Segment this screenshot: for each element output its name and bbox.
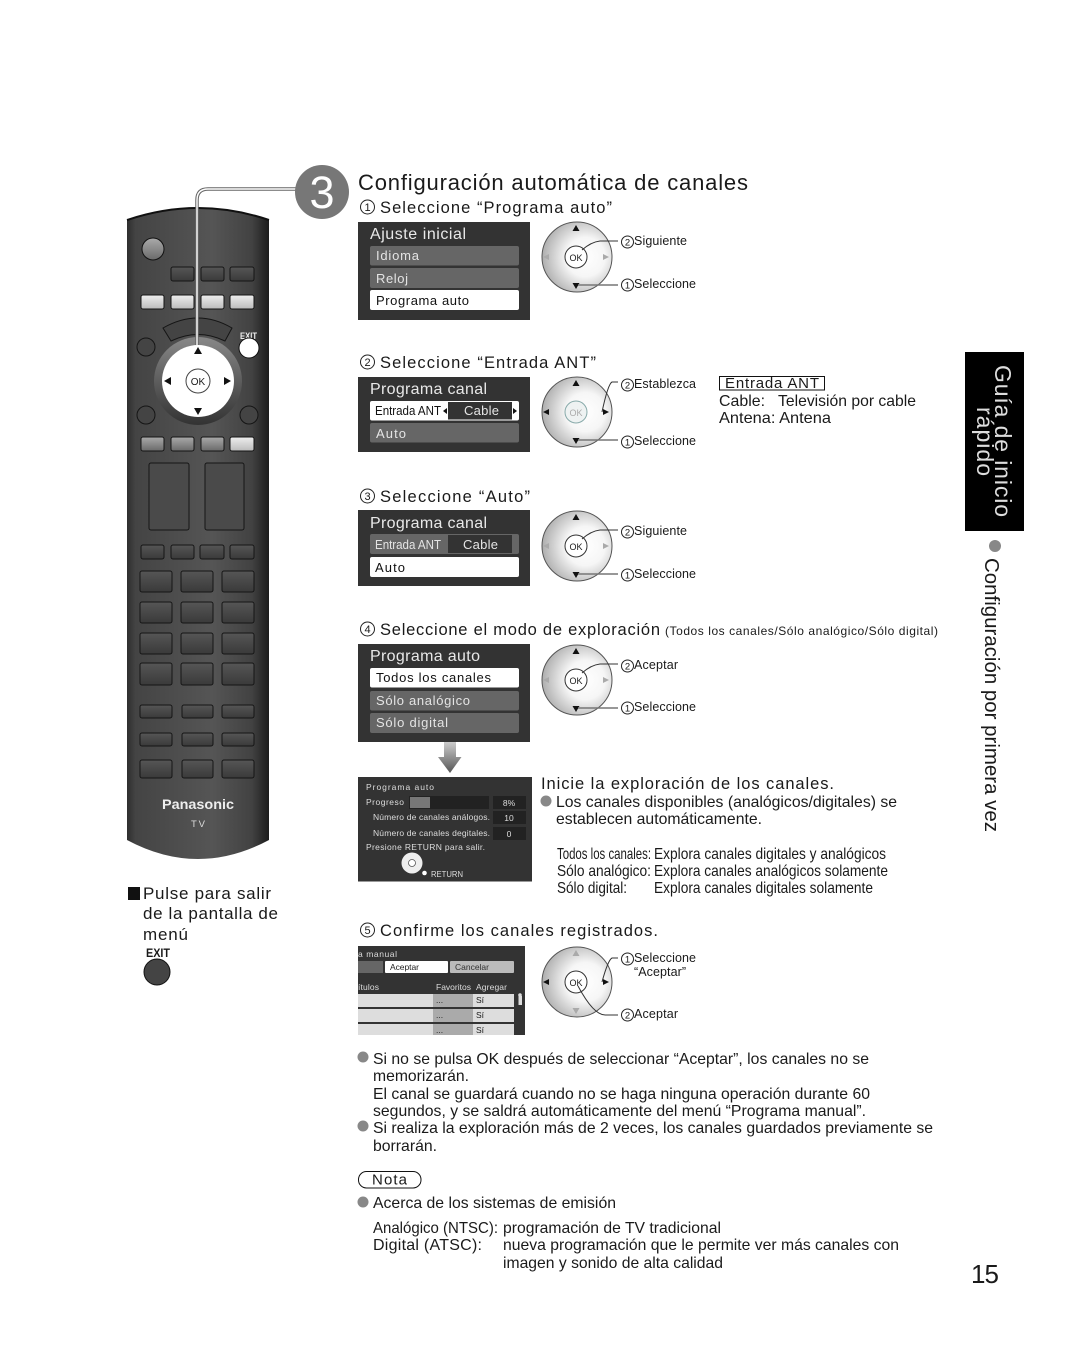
dial: step 5: “Aceptar” xyxy=(634,965,686,979)
step 4 heading: 4 xyxy=(364,624,371,636)
title: Configuración automática de canales xyxy=(358,170,748,195)
TV label: TV xyxy=(191,819,206,830)
step 4 heading xyxy=(360,621,938,639)
text block: notes: Si realiza la exploración más de 2 veces, los canales guardados previamente se xyxy=(373,1120,933,1137)
menu: Ajuste inicial: Programa auto xyxy=(376,293,469,308)
step 4 heading: Seleccione el modo de exploración xyxy=(380,621,660,639)
exit instruction xyxy=(128,884,278,985)
panel: manual program screen: ... xyxy=(436,995,443,1005)
side tab: quick start guide: Guía de inicio xyxy=(990,365,1016,517)
text block: scan modes: Explora canales digitales y analógicos xyxy=(654,846,886,863)
lower button rows xyxy=(140,437,254,778)
remote body xyxy=(127,208,269,859)
exit instruction: menú xyxy=(143,925,188,944)
dial: step 2: Seleccione xyxy=(634,434,696,448)
panel: manual program screen: Aceptar xyxy=(390,962,419,972)
panel: manual program screen: ... xyxy=(436,1010,443,1020)
exit instruction: Pulse para salir xyxy=(143,884,271,903)
text block: notes: borrarán. xyxy=(373,1138,437,1155)
dial: step 1: Seleccione xyxy=(634,277,696,291)
dial: step 5: Aceptar xyxy=(634,1007,678,1021)
panel: manual program screen: Sí xyxy=(476,1025,485,1035)
panel: scan progress screen: 0 xyxy=(507,829,512,839)
dial: step 3: Seleccione xyxy=(634,567,696,581)
text block: broadcast systems: nueva programación que le permite ver más canales con xyxy=(503,1237,899,1254)
step 3 heading: Seleccione “Auto” xyxy=(380,488,530,506)
text block: notes: El canal se guardará cuando no se haga ninguna operación durante 60 xyxy=(373,1086,870,1103)
menu: Ajuste inicial: Idioma xyxy=(376,248,420,263)
dial: step 1 xyxy=(542,222,696,292)
exit instruction: de la pantalla de xyxy=(143,904,278,923)
text block: scan modes: Sólo digital: xyxy=(557,880,627,897)
menu: Programa canal, Auto: Auto xyxy=(375,560,405,575)
menu: Programa auto: Sólo analógico xyxy=(376,693,470,708)
icon: exit button: EXIT xyxy=(146,946,171,960)
remote control xyxy=(127,208,269,859)
step 2 heading: 2 xyxy=(364,357,371,369)
page number: 15 xyxy=(971,1259,999,1289)
panel: scan progress screen: Programa auto xyxy=(366,782,434,792)
step 5 heading: Confirme los canales registrados. xyxy=(380,922,658,940)
dial: step 3: 2 xyxy=(625,528,630,538)
dial: step 1: OK xyxy=(569,253,583,263)
panel: manual program screen xyxy=(358,946,525,1035)
text block: broadcast systems: programación de TV tradicional xyxy=(503,1220,721,1237)
text block: broadcast systems: Acerca de los sistemas de emisión xyxy=(373,1195,616,1212)
exit button xyxy=(239,331,259,358)
panel: scan progress screen: 8% xyxy=(503,798,516,808)
menu: Programa canal, Auto: Programa canal xyxy=(370,515,487,532)
menu: Programa canal, Entrada ANT: Cable xyxy=(464,403,499,418)
dial: step 3: 1 xyxy=(625,570,630,582)
menu: Programa canal, Auto: Cable xyxy=(463,537,498,552)
dial: step 1: Siguiente xyxy=(634,234,687,248)
panel: scan progress screen: Presione RETURN para salir. xyxy=(366,842,485,852)
connector line from step 3 to directional pad xyxy=(197,189,298,345)
panel: manual program screen: a manual xyxy=(358,949,397,959)
menu: Programa canal, Auto xyxy=(358,510,530,586)
text block: notes: segundos, y se saldrá automáticamente del menú “Programa manual”. xyxy=(373,1103,866,1120)
dial: step 2 xyxy=(542,377,696,448)
side heading: first time setup: Configuración por primera vez xyxy=(980,558,1002,832)
dial: step 5: OK xyxy=(569,978,583,988)
dial: step 5 xyxy=(542,947,696,1022)
nota badge xyxy=(358,1172,421,1188)
step 1 heading: Seleccione “Programa auto” xyxy=(380,199,612,217)
step number 3 xyxy=(295,165,349,219)
step 2 heading: Seleccione “Entrada ANT” xyxy=(380,354,596,372)
text block: notes: memorizarán. xyxy=(373,1068,469,1085)
dial: step 4: 2 xyxy=(625,662,630,672)
top button rows xyxy=(137,267,258,424)
icon: exit button xyxy=(144,946,171,985)
dial: step 3: Siguiente xyxy=(634,524,687,538)
dial: step 1: 2 xyxy=(625,238,630,248)
panel: scan progress screen: Número de canales análogos. xyxy=(373,812,490,822)
dial: step 2: 2 xyxy=(625,380,630,392)
text block: broadcast systems: imagen y sonido de alta calidad xyxy=(503,1255,723,1272)
step number 3: 3 xyxy=(309,167,335,218)
directional pad: OK xyxy=(191,377,206,388)
step 1 heading: 1 xyxy=(364,202,371,214)
panel: manual program screen: ítulos xyxy=(358,982,379,992)
menu: Programa auto: Programa auto xyxy=(370,648,480,665)
dial: step 4: Seleccione xyxy=(634,700,696,714)
callout: Entrada ANT options: Cable: xyxy=(719,393,765,410)
text block: start scan xyxy=(540,775,897,828)
text block: scan modes: Explora canales analógicos solamente xyxy=(654,863,888,880)
dial: step 2: Establezca xyxy=(634,377,696,391)
nota badge: Nota xyxy=(372,1172,408,1188)
panel: manual program screen: ... xyxy=(436,1025,443,1035)
text block: start scan: Los canales disponibles (analógicos/digitales) se xyxy=(556,794,897,811)
dial: step 3: OK xyxy=(569,542,583,552)
dial: step 5: Seleccione xyxy=(634,951,696,965)
text block: notes: Si no se pulsa OK después de seleccionar “Aceptar”, los canales no se xyxy=(373,1051,869,1068)
text block: broadcast systems: Digital (ATSC): xyxy=(373,1237,482,1254)
dial: step 4 xyxy=(542,645,696,715)
dial: step 1: 1 xyxy=(625,280,630,292)
text block: notes xyxy=(358,1051,933,1155)
panel: scan progress screen: Número de canales degitales. xyxy=(373,828,490,838)
menu: Programa auto: Sólo digital xyxy=(376,715,448,730)
text block: scan modes: Todos los canales: xyxy=(557,846,651,863)
text block: start scan: establecen automáticamente. xyxy=(556,811,762,828)
panel: scan progress screen xyxy=(358,777,532,882)
power button xyxy=(142,238,164,260)
directional pad xyxy=(154,337,242,425)
dial: step 3 xyxy=(542,511,696,582)
callout: Entrada ANT options: Entrada ANT xyxy=(725,375,819,392)
callout: Entrada ANT options: Televisión por cable xyxy=(778,393,916,410)
menu: Programa auto xyxy=(358,644,530,742)
text block: broadcast systems xyxy=(358,1195,899,1272)
text block: start scan: Inicie la exploración de los canales. xyxy=(541,775,834,793)
panel: scan progress screen: Progreso xyxy=(366,797,404,807)
callout: Entrada ANT options: Antena: Antena xyxy=(719,410,831,427)
text block: scan modes: Sólo analógico: xyxy=(557,863,651,880)
menu: Ajuste inicial xyxy=(358,222,530,320)
menu: Programa auto: Todos los canales xyxy=(376,670,492,685)
menu: Programa canal, Entrada ANT: Auto xyxy=(376,426,406,441)
menu: Programa canal, Entrada ANT: Entrada ANT xyxy=(375,403,441,418)
panel: manual program screen: Favoritos xyxy=(436,982,471,992)
text block: scan modes: Explora canales digitales solamente xyxy=(654,880,873,897)
dial: step 2: OK xyxy=(569,408,583,418)
Panasonic logo: Panasonic xyxy=(162,796,234,812)
menu: Programa canal, Auto: Entrada ANT xyxy=(375,537,441,552)
text block: broadcast systems: Analógico (NTSC): xyxy=(373,1220,498,1237)
side tab: quick start guide: rápido xyxy=(972,407,998,476)
dial: step 5: 1 xyxy=(625,954,630,966)
callout: Entrada ANT options xyxy=(719,375,916,427)
dial: step 4: OK xyxy=(569,676,583,686)
menu: Ajuste inicial: Reloj xyxy=(376,271,408,286)
menu: Ajuste inicial: Ajuste inicial xyxy=(370,226,466,243)
step 4 heading: (Todos los canales/Sólo analógico/Sólo digital) xyxy=(665,624,938,638)
dial: step 4: Aceptar xyxy=(634,658,678,672)
arrow: down to progress screen xyxy=(438,742,462,773)
dial: step 5: 2 xyxy=(625,1010,630,1022)
dial: step 2: 1 xyxy=(625,438,630,448)
step 5 heading: 5 xyxy=(364,925,371,937)
panel: manual program screen: Sí xyxy=(476,1010,485,1020)
menu: Programa canal, Entrada ANT: Programa canal xyxy=(370,381,487,398)
step 3 heading: 3 xyxy=(364,491,371,503)
panel: manual program screen: Agregar xyxy=(476,982,507,992)
exit button: EXIT xyxy=(240,331,257,341)
panel: manual program screen: Cancelar xyxy=(455,962,489,972)
panel: manual program screen: Sí xyxy=(476,995,485,1005)
menu: Programa canal, Entrada ANT xyxy=(358,377,530,452)
text block: scan modes xyxy=(557,846,888,897)
dial: step 4: 1 xyxy=(625,704,630,714)
panel: scan progress screen: RETURN xyxy=(431,869,463,879)
side tab: quick start guide xyxy=(965,352,1024,531)
panel: scan progress screen: 10 xyxy=(504,813,514,823)
